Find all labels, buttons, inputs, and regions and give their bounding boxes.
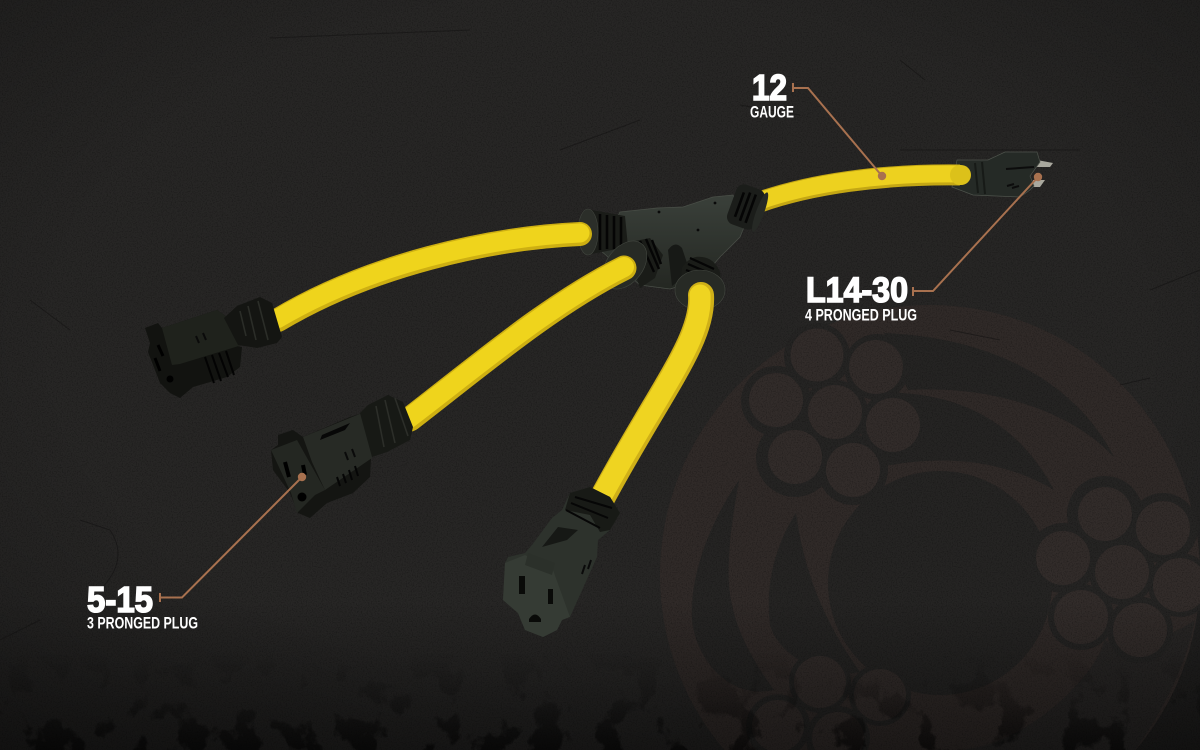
lower 5-15 outlet: [503, 487, 620, 637]
hub details: [658, 202, 716, 286]
Y adapter cable product: [145, 152, 1053, 637]
background watermark: wire strands emblem: [660, 305, 1200, 750]
value: L14-30: L14-30: [806, 271, 908, 310]
value: 12: 12: [752, 67, 787, 108]
collar: lower branch: [675, 257, 725, 310]
cable to L14-30 plug: [757, 174, 961, 203]
cable to upper 5-15 outlet: [277, 233, 580, 320]
caption: 4 pronged plug: 4 PRONGED PLUG: [805, 306, 917, 324]
upper 5-15 outlet: [145, 297, 282, 398]
collar: middle branch: [594, 233, 663, 297]
L14-30 plug: [952, 152, 1053, 197]
callout: 12 gauge: [750, 67, 886, 180]
caption: gauge: GAUGE: [750, 102, 794, 122]
middle 5-15 outlet: [271, 395, 413, 518]
value: 5-15: 5-15: [87, 579, 153, 620]
collar: right branch: [725, 182, 771, 233]
callout: L14-30: [805, 173, 1042, 324]
caption: 3 pronged plug: 3 PRONGED PLUG: [87, 614, 198, 632]
collar: left branch: [578, 209, 628, 255]
cable to lower 5-15 outlet: [599, 295, 701, 502]
leader line: L14-30: [913, 173, 1042, 296]
leader line: 12 gauge: [793, 83, 886, 180]
cable to middle 5-15 outlet: [409, 267, 624, 419]
leader line: 5-15: [160, 473, 306, 602]
callout: 5-15: [87, 473, 306, 632]
hub body: [600, 195, 747, 289]
